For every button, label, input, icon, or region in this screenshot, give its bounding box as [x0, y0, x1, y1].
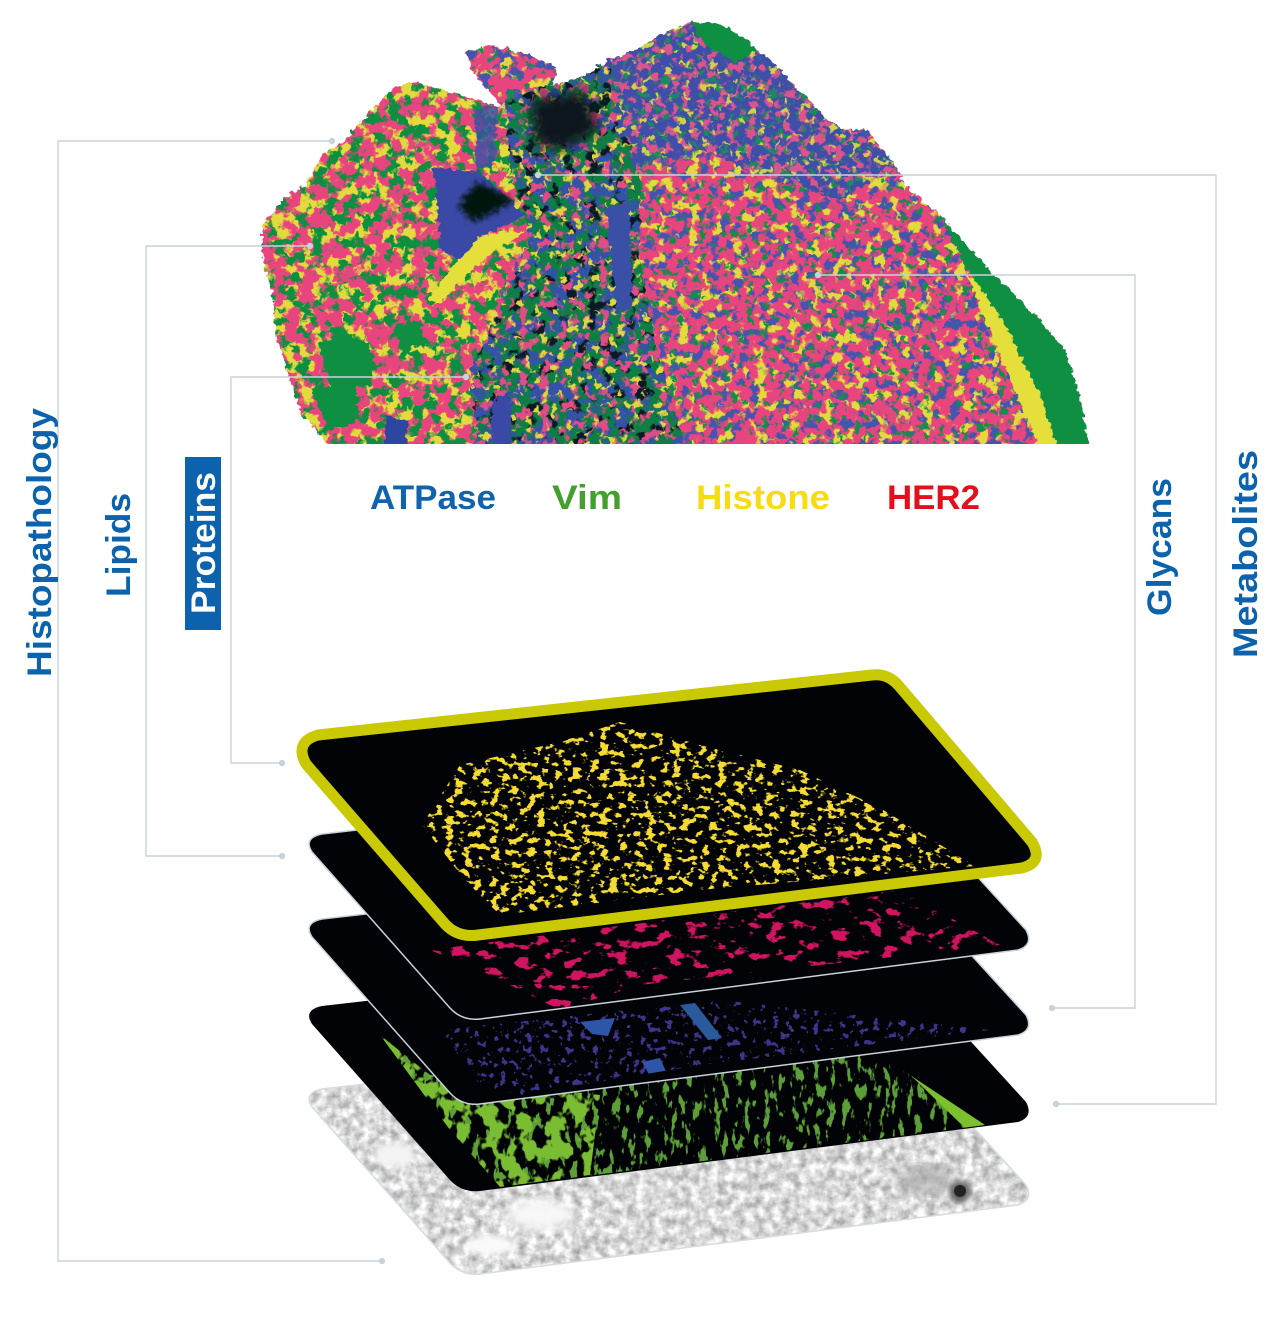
connector: histopathology: [58, 138, 384, 1264]
label: Lipids: Lipids: [100, 493, 138, 597]
layer: histopathology gray: [308, 1084, 1030, 1275]
connector: lipids: [146, 244, 312, 858]
legend: Histone: Histone: [696, 479, 830, 517]
label: Metabolites: Metabolites: [1227, 450, 1265, 658]
layer: proteins yellow highlighted: [302, 675, 1036, 940]
connector: proteins: [231, 374, 468, 766]
label: Histopathology: Histopathology: [21, 408, 59, 677]
label: Proteins highlighted: Proteins: [185, 472, 223, 614]
label: Glycans: Glycans: [1141, 478, 1179, 616]
layer: lipids pink: [308, 830, 1030, 1020]
legend: HER2: HER2: [887, 479, 980, 517]
tissue composite image: [260, 20, 1090, 444]
connector: metabolites: [536, 172, 1216, 1106]
legend: Vim: Vim: [552, 479, 622, 517]
layer stack: [300, 675, 1040, 1280]
legend: ATPase: ATPase: [370, 479, 496, 517]
connector: glycans: [816, 272, 1135, 1010]
layer: glycans blue: [308, 913, 1030, 1105]
layer: metabolites green: [309, 1000, 1029, 1192]
legend: [370, 479, 980, 517]
